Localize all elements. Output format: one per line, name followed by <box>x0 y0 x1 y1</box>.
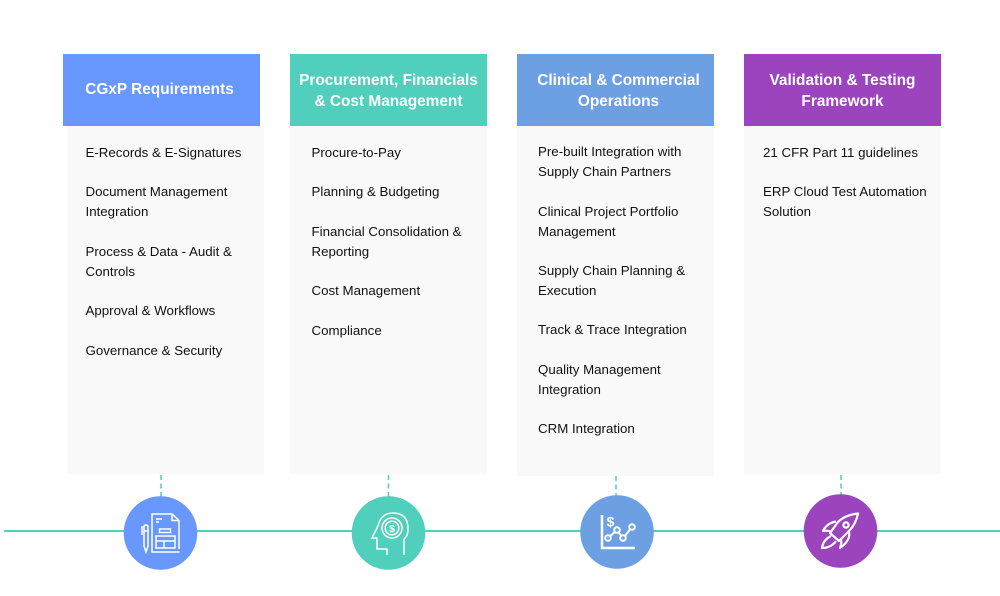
heading: Validation & Testing Framework: Framework <box>801 92 884 110</box>
list: clinical items: Integration <box>538 382 601 397</box>
connector 4 <box>840 475 842 495</box>
list: procurement items: Procure-to-Pay <box>312 145 401 160</box>
connector 1 <box>160 475 162 497</box>
list: procurement items: Reporting <box>312 244 369 259</box>
icon: growth chart <box>580 495 654 569</box>
list: validation items <box>763 145 927 219</box>
icon: head with dollar: $ <box>389 523 395 535</box>
list: clinical items: Management <box>538 224 616 239</box>
list: clinical items <box>538 144 687 436</box>
icon: rocket <box>804 494 877 568</box>
list: clinical items: Supply Chain Planning & <box>538 263 685 278</box>
heading: Clinical & Commercial Operations <box>517 54 714 126</box>
icon: document and pen <box>124 496 197 570</box>
heading: Clinical & Commercial Operations: Operations <box>578 92 659 110</box>
connector 3 <box>615 476 617 496</box>
icon: growth chart: $ <box>607 514 615 530</box>
panel: clinical body <box>517 126 714 476</box>
list: validation items: Solution <box>763 204 811 219</box>
heading: CGxP Requirements <box>63 54 260 126</box>
list: validation items: 21 CFR Part 11 guidelines <box>763 145 918 160</box>
timeline line <box>4 530 1000 532</box>
heading: Validation & Testing Framework: Validation & Testing <box>770 72 915 88</box>
icon: head with dollar <box>352 496 425 570</box>
list: clinical items: Clinical Project Portfolio <box>538 204 678 219</box>
list: CGxP items: Integration <box>86 204 148 219</box>
list: CGxP items: Approval & Workflows <box>86 303 215 318</box>
list: CGxP items: Controls <box>86 264 135 279</box>
panel: validation body <box>744 126 941 474</box>
heading: Procurement, Financials & Cost Management: & Cost Management <box>315 92 462 110</box>
heading: Validation & Testing Framework <box>744 54 941 126</box>
list: CGxP items <box>86 145 241 358</box>
list: CGxP items: Document Management <box>86 184 227 199</box>
list: procurement items: Compliance <box>312 323 382 338</box>
list: procurement items: Planning & Budgeting <box>312 184 439 199</box>
list: CGxP items: E-Records & E-Signatures <box>86 145 241 160</box>
list: validation items: ERP Cloud Test Automation <box>763 184 927 199</box>
heading: Clinical & Commercial Operations: Clinical & Commercial <box>537 72 700 88</box>
heading: Procurement, Financials & Cost Management <box>290 54 487 126</box>
connector 2 <box>388 475 390 497</box>
panel: CGxP body <box>66 126 264 474</box>
list: clinical items: Quality Management <box>538 362 661 377</box>
list: clinical items: Supply Chain Partners <box>538 164 671 179</box>
list: clinical items: Track & Trace Integration <box>538 322 687 337</box>
list: procurement items <box>312 145 462 338</box>
panel: procurement body <box>290 126 487 474</box>
heading: CGxP Requirements: CGxP Requirements <box>85 80 234 98</box>
list: clinical items: Execution <box>538 283 596 298</box>
list: CGxP items: Governance & Security <box>86 343 222 358</box>
heading: Procurement, Financials & Cost Management: Procurement, Financials <box>299 72 478 88</box>
list: procurement items: Financial Consolidation & <box>312 224 462 239</box>
list: CGxP items: Process & Data - Audit & <box>86 244 232 259</box>
list: clinical items: CRM Integration <box>538 421 635 436</box>
list: procurement items: Cost Management <box>312 283 420 298</box>
list: clinical items: Pre-built Integration with <box>538 144 681 159</box>
